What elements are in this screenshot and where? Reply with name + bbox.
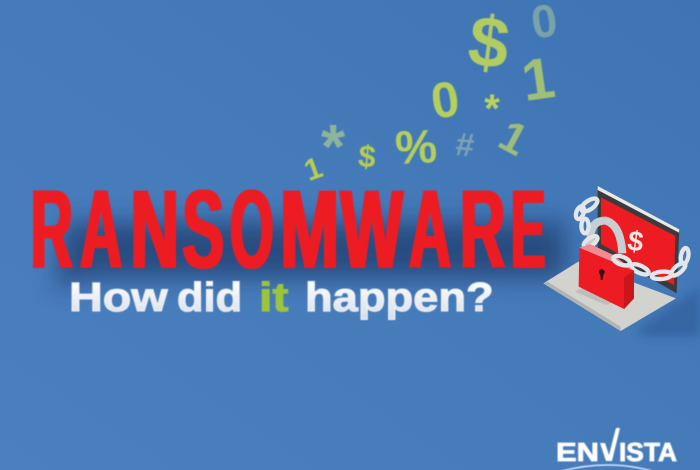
title: RANSOMWARE: M bbox=[280, 167, 339, 292]
title: RANSOMWARE: R bbox=[460, 168, 505, 293]
symbol: large dollar: $ bbox=[464, 1, 514, 85]
laptop shadow bbox=[637, 287, 700, 337]
subtitle: How did it happen?: How bbox=[69, 275, 168, 320]
subtitle: How did it happen?: it bbox=[259, 274, 289, 320]
symbol: large 1: 1 bbox=[518, 45, 559, 114]
symbol: hash: # bbox=[454, 125, 476, 164]
subtitle: How did it happen?: did bbox=[177, 274, 242, 320]
laptop screen bbox=[598, 186, 679, 293]
title shadow bbox=[55, 222, 565, 290]
logo: Envista: ISTA bbox=[619, 437, 677, 467]
title: RANSOMWARE: S bbox=[182, 168, 224, 293]
chain link over padlock bbox=[612, 254, 631, 267]
title: RANSOMWARE bbox=[31, 166, 545, 293]
title: RANSOMWARE: N bbox=[130, 166, 179, 292]
padlock shackle bbox=[591, 221, 622, 253]
title: RANSOMWARE: R bbox=[31, 166, 73, 292]
chain bbox=[574, 196, 690, 280]
symbol: percent: % bbox=[394, 119, 438, 174]
logo wordmark: EN bbox=[556, 437, 599, 467]
symbol: slanted 1: 1 bbox=[491, 111, 536, 166]
laptop base bbox=[543, 262, 676, 331]
symbol: asterisk: * bbox=[321, 113, 346, 182]
title: RANSOMWARE: W bbox=[340, 168, 403, 292]
title: RANSOMWARE: E bbox=[511, 168, 545, 292]
dollar on screen: $ bbox=[626, 225, 646, 258]
icon: locked laptop bbox=[543, 186, 700, 337]
logo arc bbox=[562, 465, 652, 470]
title: RANSOMWARE: A bbox=[409, 166, 451, 292]
subtitle: How did it happen? bbox=[69, 274, 494, 320]
subtitle: How did it happen?: happen? bbox=[305, 275, 494, 320]
symbol: small asterisk: * bbox=[484, 87, 500, 131]
keyhole bbox=[599, 269, 605, 280]
title: RANSOMWARE: A bbox=[80, 166, 122, 292]
symbol: 0: 0 bbox=[427, 70, 463, 130]
symbol: small dollar: $ bbox=[357, 138, 377, 175]
padlock body bbox=[579, 248, 634, 309]
logo: Envista bbox=[556, 428, 677, 470]
floating symbols bbox=[300, 0, 560, 188]
title: RANSOMWARE: O bbox=[230, 167, 274, 292]
symbol: 1: 1 bbox=[300, 151, 327, 188]
